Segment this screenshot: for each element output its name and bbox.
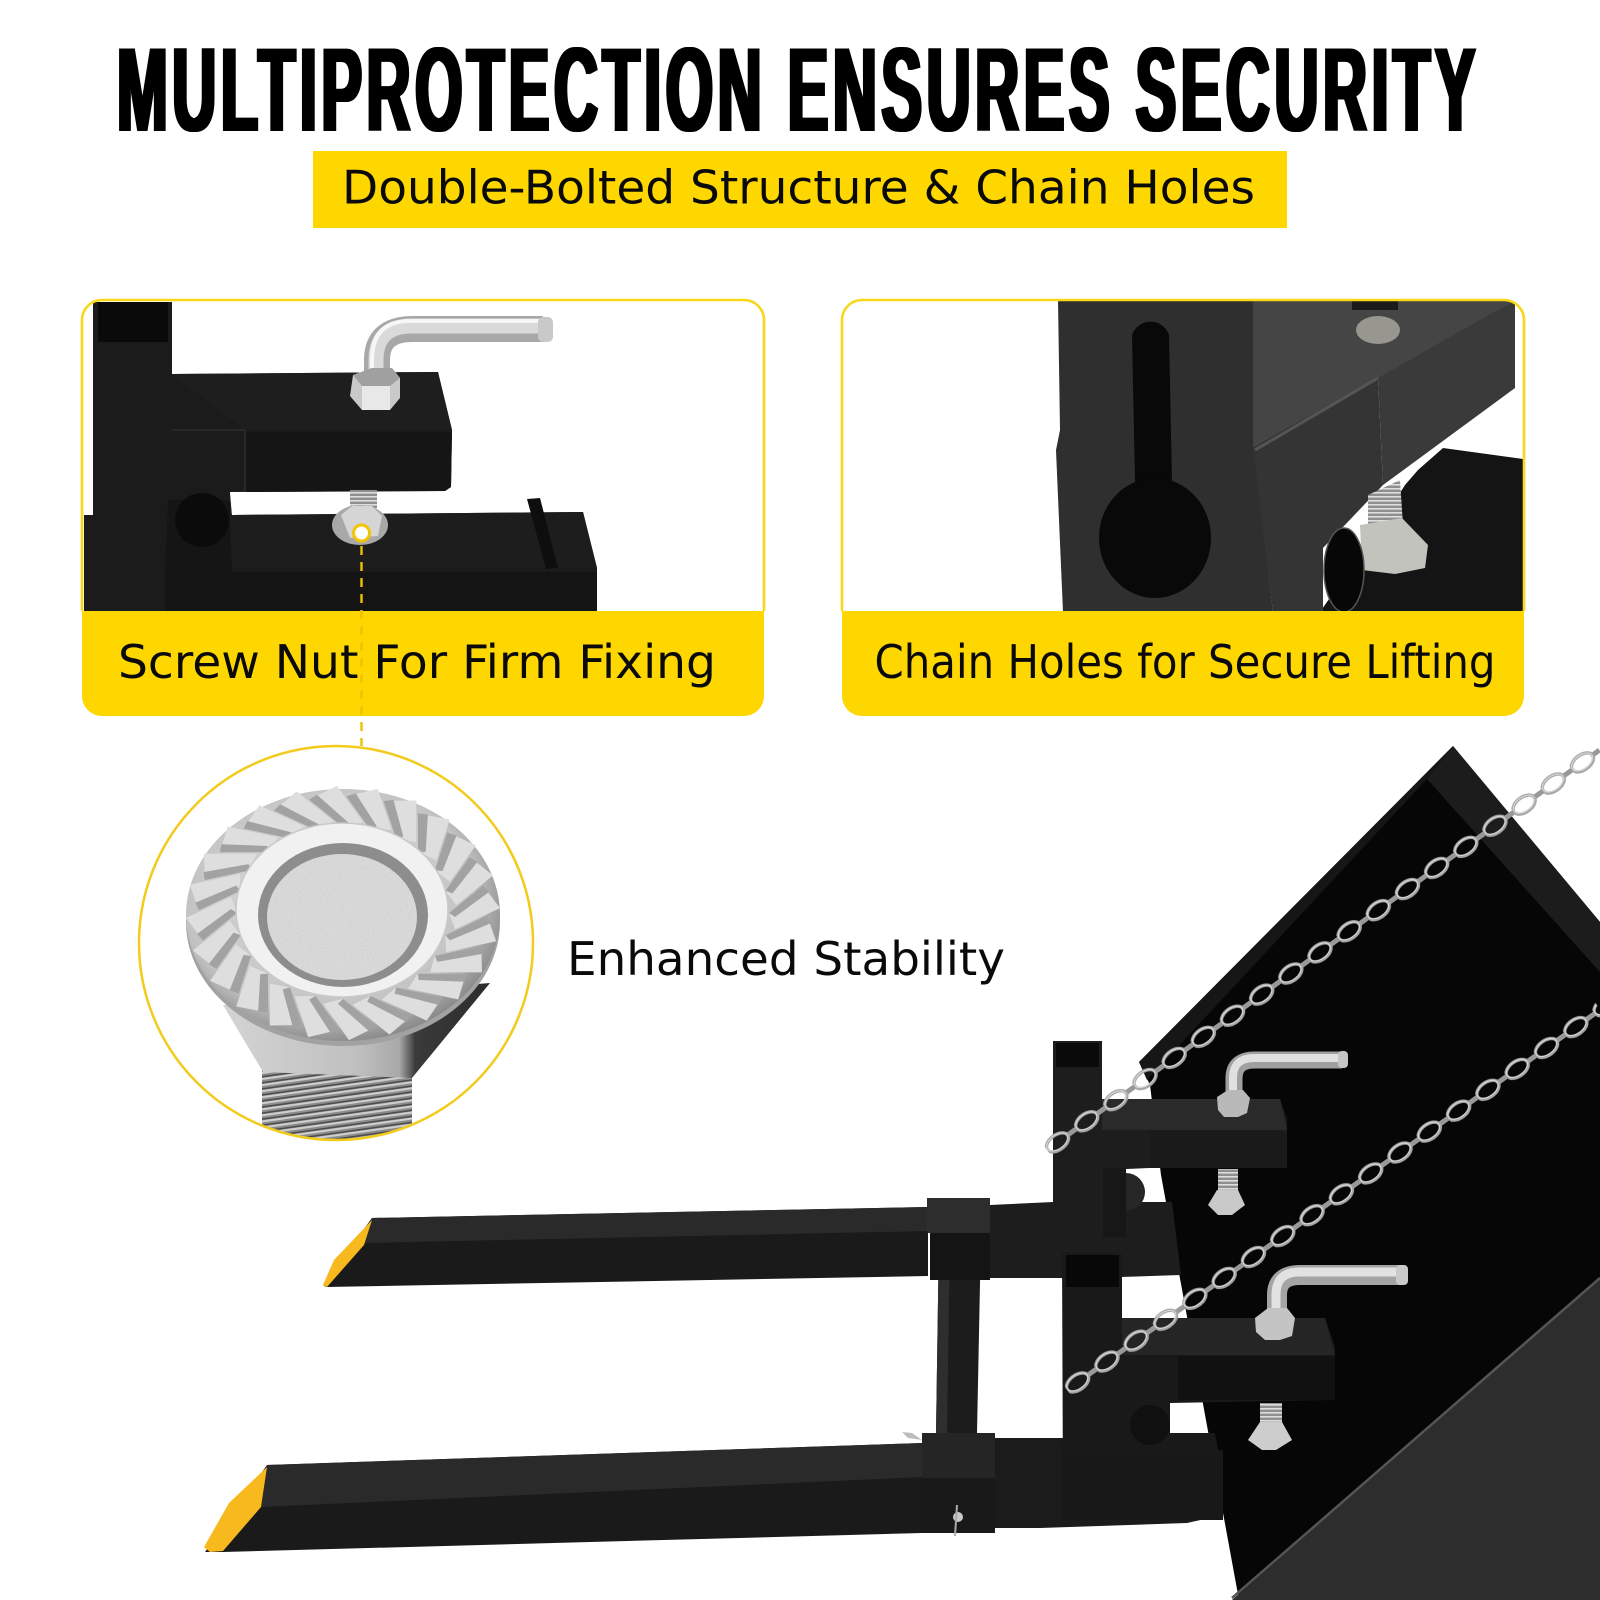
upper nut	[350, 368, 400, 410]
chain: lower	[1061, 1001, 1600, 1399]
upper post and arm	[1053, 1041, 1287, 1238]
bucket rim	[1139, 746, 1453, 1080]
main product: bucket with clamp-on forks	[204, 741, 1600, 1600]
zoom circle: flange bolt	[139, 746, 533, 1145]
lower thread	[350, 490, 377, 509]
photo: clamp bracket with pin and nut	[84, 302, 597, 611]
subtitle banner: Double-Bolted Structure & Chain Holes	[342, 160, 1255, 214]
label band	[82, 611, 764, 716]
bolt blur	[1356, 316, 1400, 344]
bucket inner wall	[1427, 746, 1600, 972]
label band	[842, 611, 1524, 716]
chain: upper	[1041, 741, 1600, 1159]
weld	[1255, 378, 1378, 450]
bolt neck	[223, 983, 490, 1078]
keyhole	[1132, 322, 1172, 482]
bucket plate behind	[1320, 448, 1530, 612]
dashed callout line	[360, 546, 363, 746]
bucket lower panel	[1232, 1278, 1600, 1600]
flange nut	[332, 505, 388, 545]
panel: chain holes	[842, 300, 1530, 716]
wing clip	[902, 1432, 922, 1440]
flange	[183, 783, 503, 1046]
bolt under arm	[1368, 480, 1403, 524]
washer ring	[236, 823, 448, 997]
lower sleeve	[902, 1432, 995, 1536]
bucket body	[1139, 746, 1600, 1600]
pin	[372, 321, 543, 375]
core	[267, 854, 417, 980]
lower fork	[204, 1443, 922, 1552]
lower rear frame	[995, 1438, 1223, 1528]
bracket upper face	[1253, 300, 1515, 447]
upper pin and nuts	[1208, 1051, 1348, 1215]
panel outline	[82, 300, 764, 611]
lower pin and nuts	[1248, 1265, 1408, 1450]
subtitle banner	[313, 151, 1287, 228]
panel: screw nut	[82, 300, 764, 716]
groove	[258, 843, 428, 987]
lower vertical face	[1253, 378, 1383, 612]
panel label: screw nut: Screw Nut For Firm Fixing	[118, 635, 716, 689]
caption: enhanced stability: Enhanced Stability	[567, 932, 1005, 986]
lower post and arm	[1062, 1253, 1335, 1520]
callout marker	[354, 525, 370, 541]
cotter pin	[953, 1512, 963, 1522]
photo: keyhole chain slot	[1056, 300, 1530, 612]
cross brace	[936, 1233, 981, 1433]
bracket left face	[1056, 300, 1273, 612]
serrated teeth	[183, 783, 503, 1043]
upper rear frame	[990, 1202, 1181, 1278]
upper sleeve	[927, 1198, 990, 1280]
bolt thread	[262, 1070, 412, 1145]
upper fork	[323, 1207, 928, 1287]
panel outline	[842, 300, 1524, 611]
arm face	[1378, 300, 1515, 485]
chain hole	[1324, 528, 1364, 612]
panel label: chain holes: Chain Holes for Secure Lifting	[874, 635, 1496, 689]
circle outline	[139, 746, 533, 1140]
